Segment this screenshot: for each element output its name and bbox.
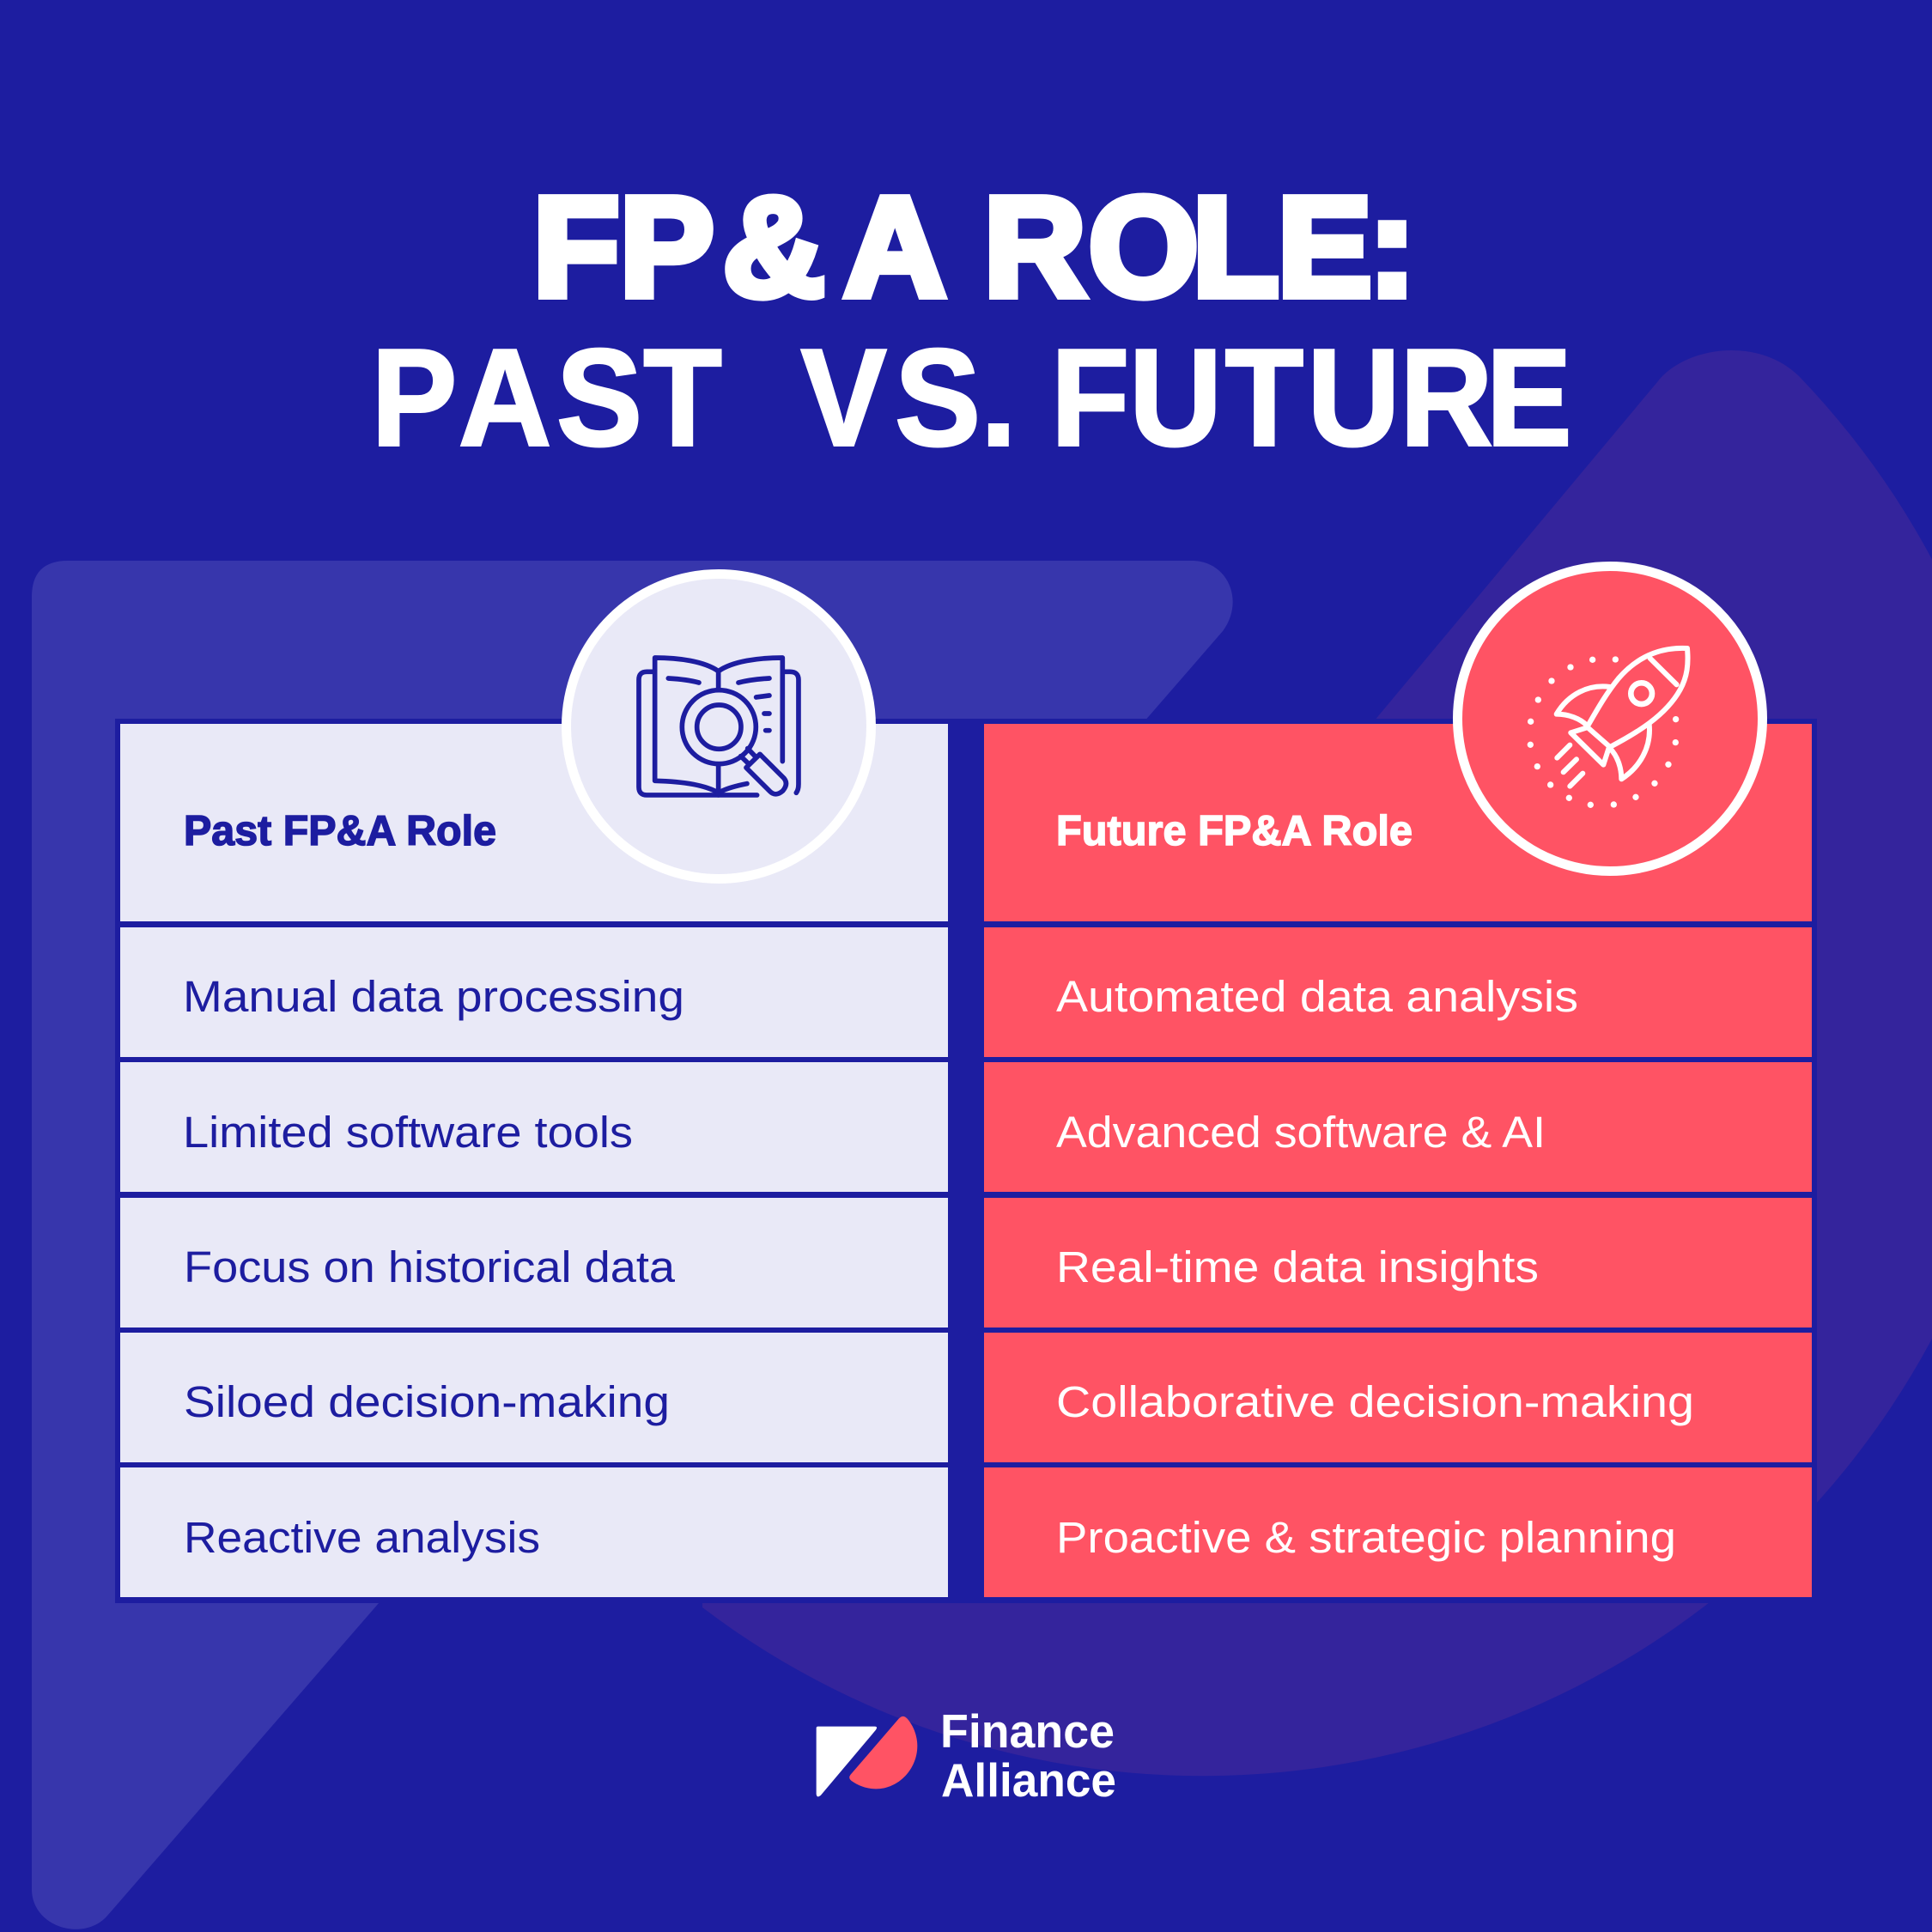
title: FP&A ROLE: [533,168,1416,325]
logo: Finance Alliance [817,1704,1116,1807]
past column text [183,808,684,1562]
title [371,168,1572,475]
future column text: Automated data analysis [1056,972,1578,1021]
comparison table [115,719,1817,1603]
background shape: right half disc [702,350,1932,1776]
past column text: Siloed decision-making [184,1377,670,1426]
future column text: Real-time data insights [1056,1242,1539,1291]
past column text: Past FP&A Role [184,808,496,854]
logo wordmark: Finance [940,1704,1115,1758]
logo mark [817,1716,917,1796]
future column text: Proactive & strategic planning [1056,1513,1676,1562]
past column text: Reactive analysis [184,1513,540,1562]
future column text: Collaborative decision-making [1056,1377,1694,1426]
future column text [1056,808,1694,1562]
title: PAST VS. FUTURE [371,319,1572,475]
past column text: Limited software tools [183,1108,633,1157]
future column text: Advanced software & AI [1056,1108,1546,1157]
background shape: left rounded triangle [32,561,1233,1929]
logo wordmark: Alliance [941,1753,1116,1807]
icon: rocket [1458,567,1762,871]
future column text: Future FP&A Role [1056,808,1413,854]
panel: future column [984,724,1812,1597]
past column text: Manual data processing [183,972,684,1021]
panel: past column [120,724,948,1597]
past column text: Focus on historical data [184,1242,676,1291]
logo wordmark [940,1704,1116,1807]
icon: book with magnifier [567,574,871,879]
